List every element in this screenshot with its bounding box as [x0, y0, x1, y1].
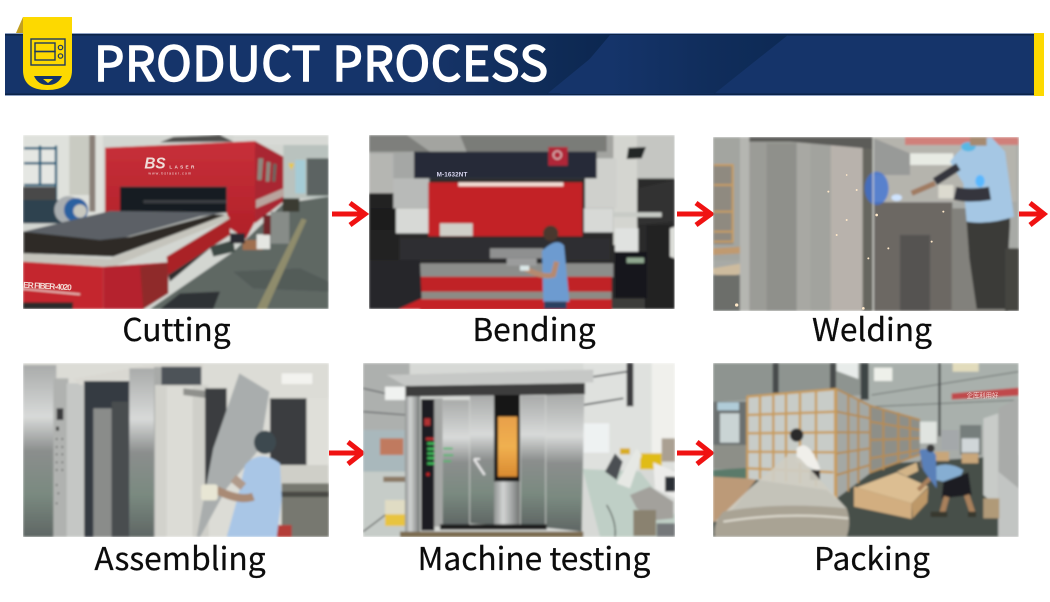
panel: cutting: [23, 135, 329, 351]
panel: machine testing: [363, 363, 675, 580]
icon: yellow oven badge: [16, 17, 72, 90]
arrow: testing to packing: [677, 442, 711, 464]
photo: press brake with operator: [369, 135, 675, 310]
arrow: welding onward: [1019, 203, 1044, 225]
label: Welding: Welding: [812, 305, 932, 351]
label: Machine testing: Machine testing: [418, 534, 650, 580]
photo: welder with sparks: [713, 137, 1019, 312]
label: Assembling: Assembling: [94, 534, 266, 580]
label: Bending: Bending: [472, 305, 596, 351]
welding sparks: [735, 174, 944, 310]
photo: rotary oven under test: [363, 363, 675, 537]
title: PRODUCT PROCESS: [94, 25, 548, 95]
photo: worker assembling oven panel: [23, 363, 329, 537]
banner bar: [5, 33, 1044, 96]
factory banner text: 企库利用好: [967, 390, 999, 399]
machine model text: M-1632NT: [437, 172, 467, 179]
machine brand text: BS: [144, 155, 166, 172]
label: Cutting: Cutting: [122, 305, 231, 351]
label: Packing: Packing: [814, 534, 930, 580]
arrow: assembling to testing: [329, 442, 362, 464]
photo: laser cutting machine: ER FIBER-4020: [23, 280, 72, 292]
photo: laser cutting machine: LASER: [169, 164, 195, 169]
panel: packing: [713, 363, 1019, 580]
arrow: cutting to bending: [332, 203, 365, 225]
photo: workers packing crates: [713, 363, 1019, 537]
photo: laser cutting machine: www.bslaser.com: [148, 171, 191, 175]
panel: welding: [713, 137, 1019, 351]
panel: assembling: [23, 363, 329, 580]
photo: laser cutting machine: [23, 135, 329, 309]
arrow: bending to welding: [677, 203, 711, 225]
header banner: [5, 17, 1044, 96]
panel: bending: [369, 135, 675, 351]
